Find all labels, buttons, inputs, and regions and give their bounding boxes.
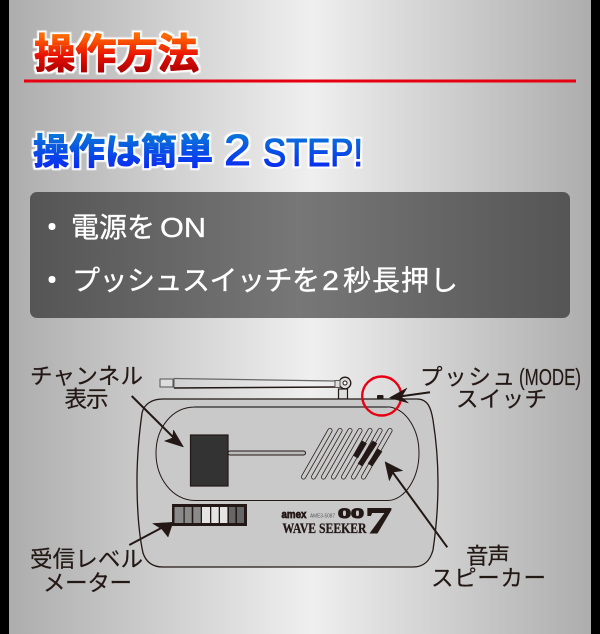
antenna: [160, 377, 351, 399]
logo: 7: [365, 501, 392, 542]
label: signal meter: メーター: [43, 571, 132, 596]
channel display: [190, 435, 228, 486]
subtitle: STEP!: [263, 132, 363, 175]
label: push switch: プッシュ: [420, 365, 515, 390]
step 2 text: 2: [322, 265, 339, 296]
label: push switch: スイッチ: [456, 387, 547, 412]
label: channel display: [30, 364, 143, 412]
step 2 text: 秒長押し: [343, 265, 458, 296]
label: speaker: [431, 544, 546, 591]
arrow: channel display: [132, 396, 184, 447]
step 2 text: [38, 265, 458, 296]
logo: WAVE SEEKER: [282, 521, 367, 537]
label: signal meter: [30, 547, 143, 596]
logo: amex: [282, 509, 307, 521]
step 1 text: ・: [38, 212, 66, 243]
arrow: signal meter: [129, 522, 173, 545]
logo: AME3-5087: [310, 514, 335, 520]
title underline: [24, 80, 576, 82]
signal meter: [172, 504, 247, 526]
step 1 text: 電源を: [71, 212, 155, 243]
display stadium: [156, 407, 419, 500]
arrow: speaker: [385, 462, 447, 547]
label: channel display: 表示: [64, 387, 108, 412]
label: speaker: スピーカー: [431, 566, 546, 591]
tuner bar: [228, 451, 306, 455]
label: speaker: 音声: [466, 544, 510, 569]
subtitle: 操作は簡単: [33, 131, 213, 172]
radio diagram: [137, 376, 438, 567]
label: signal meter: 受信レベル: [30, 547, 143, 572]
push button: [377, 395, 384, 400]
label: push switch: [420, 364, 581, 412]
step 2 text: ・: [38, 265, 66, 296]
logo: [282, 501, 392, 542]
step 1 text: ON: [160, 212, 206, 243]
subtitle: [33, 126, 363, 175]
red highlight circle: [362, 376, 401, 416]
radio body: [137, 399, 438, 567]
logo: 00: [338, 505, 364, 521]
speaker grille: [304, 430, 390, 477]
title: 操作方法: [34, 31, 199, 77]
step 1 text: [38, 212, 206, 243]
arrow: push switch: [390, 388, 430, 403]
panel: steps: [30, 192, 570, 318]
label: channel display: チャンネル: [30, 364, 143, 389]
step 2 text: プッシュスイッチを: [72, 265, 320, 296]
subtitle: 2: [224, 126, 251, 175]
